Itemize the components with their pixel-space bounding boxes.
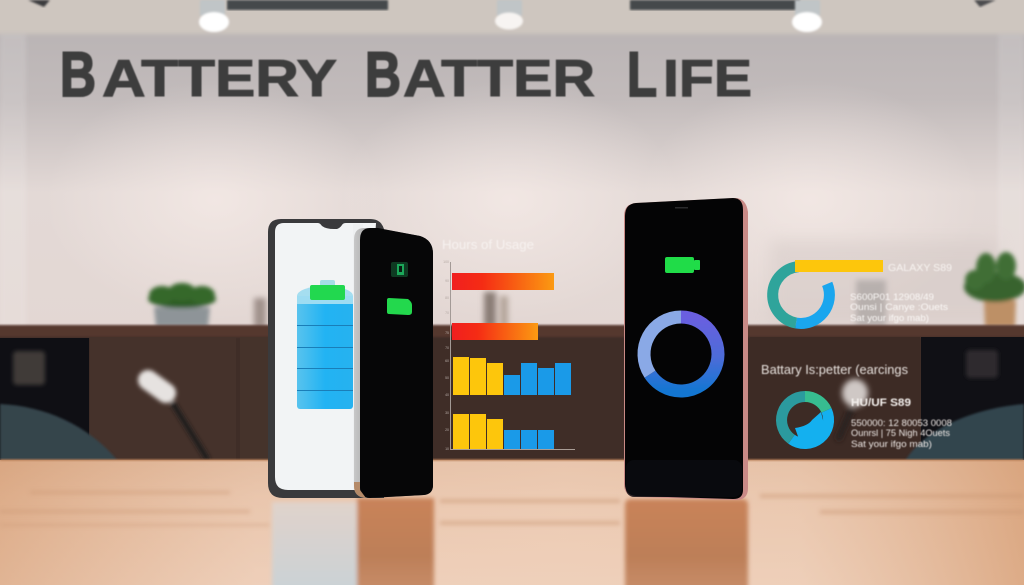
title: IFE (663, 50, 752, 108)
background: shelf objects (254, 280, 886, 328)
spec lines: Ounsi | Canye :Ouets (850, 302, 949, 312)
background: microphone left (148, 380, 208, 460)
title: B (365, 40, 401, 110)
background: plant left (148, 283, 216, 327)
table (0, 459, 1024, 585)
model label: HU/UF S89 (851, 397, 911, 409)
ceiling lights (199, 0, 822, 32)
axis tick labels: 60 (445, 359, 449, 363)
donut chart (773, 267, 829, 323)
battery illustration (297, 280, 353, 409)
yellow and blue bars row 1 (453, 357, 571, 395)
axis tick labels: 70 (445, 346, 449, 350)
title: L (627, 40, 657, 110)
spec lines: 550000: 12 80053 0008 (851, 418, 952, 428)
title: ATTERY (102, 50, 337, 108)
axis tick labels: 75 (445, 331, 449, 335)
background: cabinet (0, 325, 1024, 461)
title (60, 40, 752, 110)
panel: HU/UF S89 stats (782, 396, 952, 449)
background: chair left (0, 404, 118, 461)
panel: Galaxy S89 stats (773, 260, 952, 323)
yellow and blue bars row 2 (453, 414, 554, 449)
axis tick labels: 70 (445, 311, 449, 315)
green battery icon (387, 298, 412, 315)
spec lines: Ounrsl | 75 Nigh 4Ouets (851, 428, 951, 438)
axis tick labels: 20 (445, 428, 449, 432)
right phone (624, 198, 748, 500)
red bars (452, 273, 554, 340)
chart heading: Hours of Usage (442, 238, 534, 252)
background: plant right (964, 252, 1024, 327)
axis tick labels: 100 (443, 260, 449, 264)
left phone: black front (354, 228, 433, 498)
spec lines: Sat your ifgo mab) (851, 439, 932, 449)
spec lines: Sat your ifgo mab) (850, 313, 929, 323)
axis tick labels (443, 260, 449, 451)
yellow bar (795, 260, 883, 272)
heading: battery comparison: Battary Is:petter (earcings (761, 362, 908, 377)
green battery (665, 257, 700, 273)
chart: hours of usage (442, 238, 575, 451)
background: microphone right (838, 379, 868, 440)
title: ATTER (403, 50, 595, 108)
spec lines (851, 418, 952, 449)
background: office room (0, 0, 1024, 332)
donut chart (782, 396, 829, 444)
phone reflections on table (272, 498, 748, 585)
axis tick labels: 80 (445, 296, 449, 300)
spec lines: S600P01 12908/49 (850, 292, 934, 302)
model label: GALAXY S89 (888, 263, 952, 274)
axis tick labels: 90 (445, 279, 449, 283)
background: chair right (905, 404, 1024, 461)
title: B (60, 40, 96, 110)
spec lines (850, 292, 949, 323)
axis tick labels: 30 (445, 411, 449, 415)
axis tick labels: 40 (445, 393, 449, 397)
axis tick labels: 10 (445, 447, 449, 451)
status icon (391, 262, 408, 277)
axis tick labels: 50 (445, 376, 449, 380)
left phone: white screen (268, 219, 384, 498)
circular gauge (644, 317, 718, 391)
